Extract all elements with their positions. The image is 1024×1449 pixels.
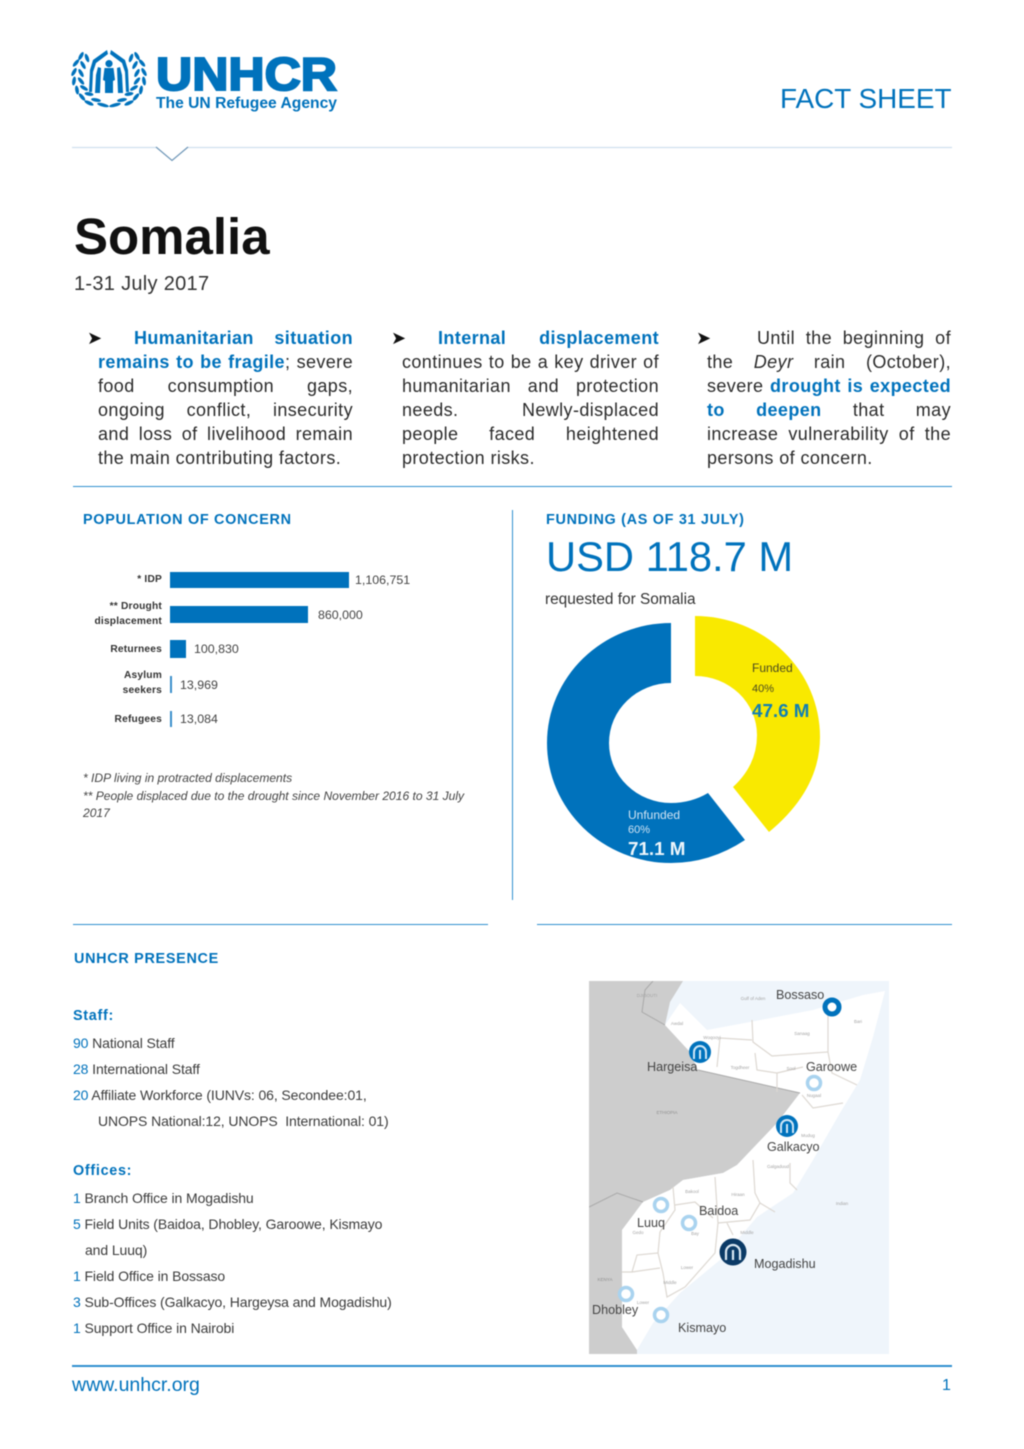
map: Somalia presence [588,980,889,1354]
map labels: Dhobley [592,1303,639,1317]
tiny region labels: Sool [786,1066,796,1071]
tiny region labels: Mudug [801,1133,815,1138]
tiny region labels: KENYA [598,1277,612,1282]
heading: UNHCR presence: UNHCR PRESENCE [74,951,219,967]
offices list: and Luuq) [85,1242,147,1258]
text block: humanitarian situation: Humanitarian situation [134,328,353,348]
tiny region labels: Lower [637,1300,650,1305]
tiny region labels: Awdal [671,1021,683,1026]
offices list: 1 Field Office in Bossaso [73,1268,225,1284]
staff list: 28 International Staff [73,1061,200,1077]
text block: drought expected to deepen: persons of concern. [707,448,873,468]
marker: Galkacyo [776,1115,798,1137]
row: asylum seekers: seekers [123,685,162,696]
marker: Hargeisa [689,1041,711,1063]
row: asylum seekers: 13,969 [180,678,218,692]
staff list: 20 Affiliate Workforce (IUNVs: 06, Secondee:01, [73,1087,367,1103]
map labels: Kismayo [678,1321,726,1335]
page number: 1 [942,1377,951,1394]
marker: Luuq [654,1198,668,1212]
footer url: www.unhcr.org [72,1374,200,1396]
staff list [72,1008,389,1130]
text block: humanitarian situation: ongoing conflict, insecurity [98,400,353,420]
text block: drought expected to deepen: the Deyr rain (October), [707,352,951,372]
logo: UNHCR [70,48,338,112]
header rule with chevron [72,146,952,162]
footnotes: * IDP living in protracted displacements [83,771,292,785]
label: funded: Funded [752,661,793,675]
row: returnees [110,639,239,659]
subheading: offices: Offices: [73,1163,132,1179]
text block: internal displacement: protection risks. [402,448,535,468]
text block: internal displacement: ➤ [391,328,406,348]
text block: drought expected to deepen: Until the beginning of [757,328,951,348]
text block: internal displacement: Internal displacement [438,328,659,348]
map labels: Bossaso [776,988,824,1002]
text block: internal displacement: needs. Newly-displaced [402,400,659,420]
text block: internal displacement [391,328,660,469]
text block: drought expected to deepen: severe drought is expected [707,376,951,396]
row: drought displacement: ** Drought [110,601,162,612]
text block: internal displacement: people faced heightened [402,424,659,444]
label: unfunded: Unfunded [628,808,680,822]
row: refugees [114,710,218,728]
staff list: 90 National Staff [73,1035,175,1051]
offices list: 1 Branch Office in Mogadishu [73,1190,254,1206]
label: fact sheet: FACT SHEET [780,83,952,114]
text block: drought expected to deepen: ➤ [696,328,711,348]
tiny region labels: ETHIOPIA [656,1110,678,1115]
tiny region labels: Lower [681,1265,694,1270]
tiny region labels: Togdheer [731,1065,750,1070]
land: neighbouring countries [589,981,800,1354]
label: unfunded: 71.1 M [628,838,685,859]
row: IDP: * IDP [137,574,162,585]
funding total: USD 118.7 M [546,533,793,580]
row: drought displacement: displacement [94,616,162,627]
text block: humanitarian situation: remains to be fragile; severe [98,352,353,372]
staff list: UNOPS National:12, UNOPS International: 01) [98,1113,389,1129]
offices list: 5 Field Units (Baidoa, Dhobley, Garoowe, Kismayo [73,1216,382,1232]
marker: Bossaso [825,1000,839,1014]
text block: humanitarian situation [87,328,354,469]
label: unfunded: 60% [628,824,650,836]
footnotes: 2017 [83,806,110,820]
row: IDP: 1,106,751 [355,573,410,587]
tiny region labels: Gulf of Aden [741,996,766,1001]
tiny region labels: DJIBOUTI [637,993,657,998]
date: 1-31 July 2017 [74,273,209,295]
heading: population of concern: POPULATION OF CONCERN [83,512,292,528]
text block: humanitarian situation: ➤ [87,328,102,348]
map labels: Garoowe [806,1060,857,1074]
text block: drought expected to deepen: to deepen that may [707,400,951,420]
text block: drought expected to deepen [696,328,952,469]
map labels: Luuq [637,1216,665,1230]
tiny region labels: Bay [691,1231,700,1236]
tiny region labels: Woqooyi [703,1035,721,1040]
footnotes [82,771,465,820]
tiny region labels: Middle [740,1230,754,1235]
title: Somalia [74,208,270,265]
funding subtitle: requested for Somalia [545,591,696,608]
subheading: staff: Staff: [73,1008,114,1024]
row: drought displacement: 860,000 [318,608,363,622]
slice: funded [695,616,820,832]
label: funded [752,661,809,721]
label: unfunded [628,808,685,859]
logo tagline: The UN Refugee Agency [156,95,337,112]
row: asylum seekers [122,670,218,696]
heading: funding: FUNDING (AS OF 31 JULY) [546,512,745,528]
row: drought displacement [94,600,363,627]
map labels: Galkacyo [767,1140,820,1154]
tiny region labels: Bakool [685,1189,699,1194]
footnotes: ** People displaced due to the drought since November 2016 to 31 July [83,788,464,802]
marker: Garoowe [808,1076,820,1090]
label: funded: 47.6 M [752,700,809,721]
tiny region labels: Nugaal [807,1093,821,1098]
tiny region labels: Sanaag [794,1031,810,1036]
tiny region labels: Middle [663,1280,677,1285]
offices list [72,1163,392,1337]
map labels [592,988,857,1335]
tiny region labels: Gedo [632,1230,644,1235]
text block: internal displacement: humanitarian and protection [402,376,659,396]
tiny region labels: Bari [854,1019,862,1024]
text block: humanitarian situation: and loss of livelihood remain [98,424,353,444]
text block: internal displacement: continues to be a key driver of [402,352,659,372]
row: returnees: Returnees [110,644,162,655]
row: IDP [136,571,410,589]
offices list: 1 Support Office in Nairobi [73,1320,234,1336]
marker: Baidoa [682,1216,696,1230]
row: returnees: 100,830 [194,642,239,656]
donut chart: funding [546,615,821,864]
tiny region labels: Indian [836,1201,849,1206]
offices list: 3 Sub-Offices (Galkacyo, Hargeysa and Mogadishu) [73,1294,392,1310]
text block: drought expected to deepen: increase vulnerability of the [707,424,951,444]
logo wordmark: UNHCR [156,48,337,100]
marker: Mogadishu [720,1238,746,1266]
row: refugees: Refugees [115,714,162,725]
marker: Dhobley [620,1288,632,1300]
label: funded: 40% [752,683,774,695]
map labels: Hargeisa [647,1060,697,1074]
tiny region labels: Hiraan [731,1192,745,1197]
text block: humanitarian situation: the main contributing factors. [98,448,341,468]
icon: UNHCR emblem [70,50,148,108]
land: Somalia [622,991,885,1350]
row: refugees: 13,084 [180,712,218,726]
map labels: Baidoa [699,1204,738,1218]
map labels: Mogadishu [754,1257,816,1271]
text block: humanitarian situation: food consumption gaps, [98,376,353,396]
marker: Kismayo [654,1308,668,1322]
slice: unfunded [547,623,745,863]
tiny region labels: Galgaduud [767,1164,790,1169]
tiny region labels [598,993,862,1305]
row: asylum seekers: Asylum [124,670,162,681]
bar chart: population of concern [94,571,410,728]
